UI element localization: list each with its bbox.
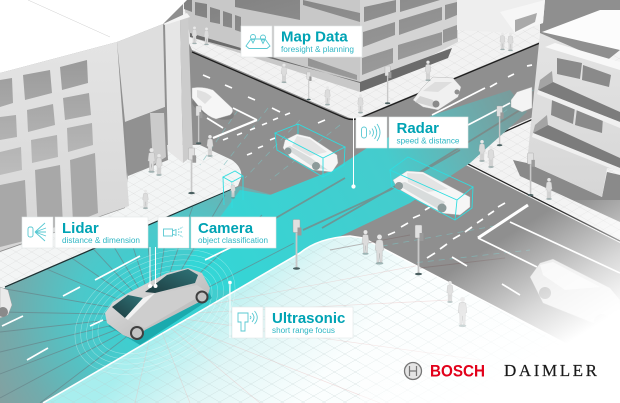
ultrasonic rings around lead car [54, 224, 256, 400]
left building [0, 0, 193, 251]
beam ray bands [262, 110, 520, 230]
back-right white building [457, 0, 545, 33]
label: Ultrasonic: Ultrasonic [272, 310, 345, 327]
car: right edge [511, 87, 532, 112]
faint sensor dashes on road [200, 70, 560, 265]
icon: radar waves [362, 124, 380, 141]
car: SUV upper right [413, 77, 461, 110]
logo: Bosch [404, 362, 485, 380]
car: radar target one [283, 134, 338, 172]
sensor rays on pavement [135, 265, 480, 403]
connector lines [148, 117, 355, 338]
label: Lidar: Lidar [62, 220, 99, 237]
label: Lidar [22, 217, 148, 248]
pedestrians [143, 27, 552, 327]
icon: lidar [28, 223, 46, 241]
lead car with sensors [105, 268, 212, 345]
car: parked top [190, 87, 236, 124]
lower-right white fade [360, 200, 620, 403]
sensor rays crossing the junction [330, 235, 505, 268]
label: Radar: Radar [396, 120, 439, 137]
label: Radar [356, 117, 468, 148]
label: Ultrasonic: short range focus [272, 325, 335, 335]
right building [513, 10, 620, 222]
sidewalk: lower block with grid [43, 236, 620, 403]
icon: ultrasonic sensor [238, 311, 257, 331]
icon: camera [164, 227, 183, 237]
lane markings [2, 65, 620, 360]
radar box one [275, 124, 345, 177]
car: radar target two [393, 171, 470, 215]
logo: Bosch: BOSCH [430, 362, 485, 380]
icon: map pins [246, 34, 270, 48]
sidewalk: left block [0, 145, 241, 290]
radar box two [390, 157, 473, 220]
sidewalk: right block [455, 50, 620, 243]
label: Radar: speed & distance [396, 136, 460, 146]
traffic lights [188, 66, 535, 275]
label: Map Data [241, 26, 362, 57]
label: Camera: Camera [198, 220, 254, 237]
label: Map Data: foresight & planning [281, 44, 354, 54]
label: Camera: object classification [198, 235, 268, 245]
logo: Daimler: DAIMLER [504, 361, 598, 380]
label: Camera [158, 217, 276, 248]
label: Ultrasonic [232, 307, 353, 338]
back building [183, 0, 458, 92]
car: left edge [0, 287, 12, 318]
sensor rays on road [0, 195, 300, 403]
sensor beam: radar wedge on road [170, 90, 527, 292]
label: Map Data: Map Data [281, 28, 348, 46]
sidewalk: top block [183, 0, 540, 120]
sensor field: road around lead car [0, 186, 320, 403]
car: lower right [530, 259, 620, 330]
pedestrian box [223, 171, 243, 208]
label: Lidar: distance & dimension [62, 235, 140, 245]
